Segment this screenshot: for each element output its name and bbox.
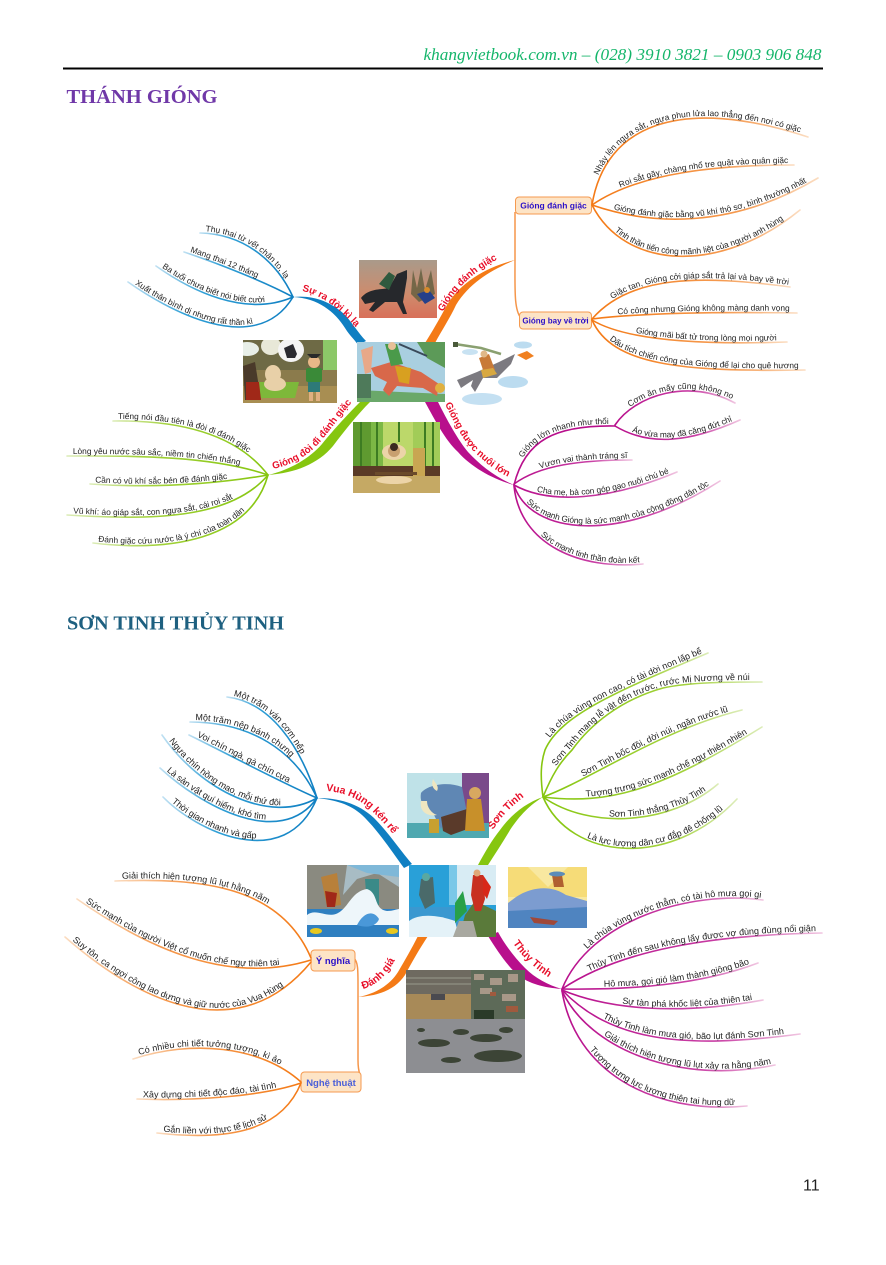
- main branch: Sơn Tinh: Sơn Tinh: [489, 793, 524, 829]
- detail: Gióng mãi bất tử: Gióng mãi bất tử trong lòng mọi người: [636, 328, 776, 342]
- box: Ý nghĩa: [311, 950, 355, 971]
- detail: Ba tuổi: Ba tuổi chưa biết nói biết cười: [162, 263, 264, 302]
- detail: Mang thai: [183, 246, 294, 298]
- detail: Là sản vật: [160, 765, 317, 822]
- box: Gióng bay về trời: Gióng bay về trời: [522, 316, 589, 326]
- detail: Sơn Tinh mang lễ vật: Sơn Tinh mang lễ vật đến trước, rước Mị Nương về núi: [552, 673, 750, 766]
- detail: Tinh thần tiến công: Tinh thần tiến công mãnh liệt của người anh hùng: [616, 216, 784, 256]
- detail: Voi chín ngà: Voi chín ngà, gà chín cựa: [199, 731, 290, 783]
- detail: Tượng trưng sức mạnh: Tượng trưng sức mạnh chế ngự thiên nhiên: [585, 727, 749, 799]
- detail: Nhảy lên ngựa sắt: Nhảy lên ngựa sắt, ngựa phun lửa lao thẳng đến nơi có giặc: [594, 110, 801, 175]
- main branch: Gióng đánh giặc: [426, 256, 514, 342]
- detail: Ngựa chín hồng mao: Ngựa chín hồng mao, mỗi thứ đôi: [169, 738, 280, 806]
- detail: Cơm ăn: [614, 382, 736, 426]
- detail: Sức mạnh tinh thần: Sức mạnh tinh thần đoàn kết: [542, 532, 640, 563]
- detail: Giải thích hiện tượng lũ: Giải thích hiện tượng lũ lụt hằng năm: [122, 870, 272, 906]
- main branch: Vua Hùng kén rể: [318, 784, 412, 868]
- detail: Gióng lớn nhanh: Gióng lớn nhanh như thổi: [519, 417, 608, 456]
- detail: Lòng yêu nước: Lòng yêu nước sâu sắc, niềm tin chiến thắng: [74, 448, 240, 466]
- detail: Có công: Có công nhưng Gióng không màng danh vọng: [618, 304, 790, 314]
- detail: Vươn vai: Vươn vai thành tráng sĩ: [538, 452, 628, 468]
- detail: Sơn Tinh thắng: Sơn Tinh thắng Thủy Tinh: [609, 784, 707, 819]
- detail: Thủy Tinh làm mưa: Thủy Tinh làm mưa gió, bão lụt đánh Sơn Tinh: [602, 1011, 784, 1041]
- detail: Mang thai: Mang thai 12 tháng: [190, 246, 258, 279]
- detail: Thụ thai: [199, 226, 294, 298]
- branch group: Gióng được nuôi lớn details: [513, 382, 741, 566]
- detail: Sức mạnh Gióng: Sức mạnh Gióng là sức mạnh của cộng đồng dân tộc: [527, 482, 708, 526]
- mind map: Thánh Gióng: [66, 110, 819, 566]
- detail: Cha mẹ: Cha mẹ, bà con góp gạo nuôi chú bé: [538, 468, 668, 496]
- detail: Một trăm ván: Một trăm ván cơm nếp: [234, 690, 304, 754]
- image: Thủy Tinh raising flood: [508, 867, 587, 928]
- detail: Sự tàn phá: [562, 990, 763, 1009]
- image: baby and father in village: [243, 340, 337, 403]
- box: Ý nghĩa: Ý nghĩa: [316, 955, 351, 967]
- branch group: Sơn Tinh details: [541, 646, 762, 848]
- box: Nghệ thuật: [301, 1072, 361, 1092]
- detail: Một trăm nệp: Một trăm nệp bánh chưng: [196, 714, 294, 758]
- detail: Thủy Tinh làm mưa: [562, 990, 800, 1041]
- detail: Sức mạnh tinh thần: [513, 486, 644, 566]
- branch group: Vua Hùng kén rể details: [160, 688, 317, 840]
- image: Gióng flying to sky: [453, 342, 534, 405]
- main branch: Sự ra đời kì lạ: [294, 284, 366, 344]
- box: Gióng bay về trời: [520, 312, 592, 329]
- detail: Suy tôn: Suy tôn, ca ngợi công lao dựng và giữ nước của Vua Hùng: [71, 934, 285, 1010]
- detail: Nhảy lên ngựa sắt: [591, 110, 809, 204]
- detail: Giặc tan: Giặc tan, Gióng cởi giáp sắt trả lại và bay về trời: [610, 270, 789, 298]
- detail: Lòng yêu nước: [66, 448, 266, 475]
- page number: 11: [803, 1178, 820, 1194]
- header contact line: khangvietbook.com.vn – (028) 3910 3821 – 0903 906 848: [424, 45, 822, 64]
- main branch: Thủy Tinh: Thủy Tinh: [514, 939, 551, 977]
- detail: Có nhiều chi tiết: [133, 1038, 301, 1082]
- detail: Dấu tích: [591, 320, 806, 372]
- detail: Tiếng nói: Tiếng nói đầu tiên là đòi đi đánh giặc: [118, 412, 250, 452]
- detail: Thụ thai: Thụ thai từ vết chân to, lạ: [206, 226, 288, 279]
- detail: Một trăm nệp: [190, 712, 317, 798]
- detail: Tượng trưng lực lượng: [562, 991, 747, 1107]
- main branch: Sự ra đời kì lạ: Sự ra đời kì lạ: [302, 284, 358, 328]
- main branch: Sơn Tinh: [478, 793, 542, 865]
- detail: Giải thích hiện tượng: [562, 991, 775, 1071]
- detail: Là chúa vùng nước thẳm: [0, 0, 763, 989]
- title: Thánh Gióng: THÁNH GIÓNG: [66, 84, 218, 108]
- image: Thủy Tinh and Sơn Tinh (centre): [409, 865, 496, 937]
- detail: Có nhiều chi tiết: Có nhiều chi tiết tưởng tượng, kì ảo: [137, 1038, 284, 1067]
- detail: Tượng trưng lực lượng: Tượng trưng lực lượng thiên tai hung dữ: [588, 1044, 735, 1107]
- detail: Gắn liền: [157, 1083, 301, 1136]
- branch group: Đánh giá details: [65, 870, 361, 1136]
- detail: Sự tàn phá: Sự tàn phá khốc liệt của thiên tai: [622, 992, 753, 1009]
- image: Gióng eating in bamboo grove: [353, 422, 440, 493]
- detail: Áo vừa may: Áo vừa may đã căng đứt chỉ: [632, 416, 732, 439]
- detail: Giải thích hiện tượng lũ: [115, 870, 311, 958]
- detail: Là chúa vùng non cao: Là chúa vùng non cao, có tài dời non lấp bể: [545, 646, 702, 738]
- detail: Là chúa vùng non cao: [541, 646, 708, 797]
- detail: Vũ khí: [66, 475, 269, 518]
- detail: Cần có vũ khí: Cần có vũ khí sắc bén đề đánh giặc: [96, 473, 227, 484]
- detail: Vũ khí: Vũ khí: áo giáp sắt, con ngựa sắt, cái roi sắt: [74, 493, 233, 517]
- detail: Gắn liền: Gắn liền với thực tế lịch sử: [163, 1112, 269, 1136]
- branch group: Gióng đánh giặc details: [514, 110, 819, 372]
- main branch: Vua Hùng kén rể: Vua Hùng kén rể: [326, 784, 399, 833]
- box: Gióng đánh giặc: Gióng đánh giặc: [520, 200, 587, 210]
- image: black horse battle: [359, 260, 437, 318]
- main branch: Gióng được nuôi lớn: Gióng được nuôi lớn: [446, 402, 510, 476]
- detail: Thời gian: Thời gian nhanh và gấp: [173, 798, 256, 840]
- detail: Gióng đánh giặc bằng vũ khí: Gióng đánh giặc bằng vũ khí thô sơ, bình thường nhất: [614, 178, 807, 218]
- main branch: Thủy Tinh: [488, 932, 562, 989]
- image: Sơn Tinh and Thủy Tinh battle waves: [307, 865, 399, 937]
- detail: Roi sắt gãy: [592, 156, 795, 205]
- detail: Giải thích hiện tượng: Giải thích hiện tượng lũ lụt xảy ra hằng năm: [603, 1029, 772, 1071]
- image: flood photos: [406, 970, 525, 1073]
- detail: Thời gian: [163, 796, 317, 840]
- detail: Tiếng nói: [112, 412, 268, 474]
- detail: Một trăm ván: [227, 688, 317, 798]
- detail: Giặc tan: [591, 270, 791, 320]
- detail: Gióng mãi bất tử: [591, 320, 788, 344]
- detail: Đánh giặc cứu nước: [92, 475, 269, 546]
- detail: Voi chín ngà: [189, 729, 317, 798]
- title: Sơn Tinh Thủy Tinh: SƠN TINH THỦY TINH: [67, 612, 284, 634]
- detail: Roi sắt gãy: Roi sắt gãy, chàng nhổ tre quật vào quân giặc: [618, 156, 788, 188]
- detail: Gióng lớn nhanh: [513, 417, 616, 486]
- main branch: Đánh giá: [358, 936, 428, 997]
- image: Gióng on red horse (centre): [357, 342, 445, 402]
- detail: Là lực lượng dân cư: [543, 797, 737, 848]
- image: elephant and suitors: [407, 773, 489, 838]
- detail: Xây dựng chi tiết: Xây dựng chi tiết độc đáo, tài tình: [143, 1080, 277, 1099]
- detail: Sơn Tinh bốc đồi: [543, 704, 742, 797]
- detail: Dấu tích: Dấu tích chiến công của Gióng để lại cho quê hương: [610, 336, 798, 370]
- detail: Sơn Tinh thắng: [543, 784, 718, 819]
- detail: Là lực lượng dân cư: Là lực lượng dân cư đắp đê chống lũ: [586, 803, 725, 848]
- main branch: Đánh giá: Đánh giá: [361, 958, 395, 989]
- detail: Đánh giặc cứu nước: Đánh giặc cứu nước là ý chí của toàn dân: [98, 508, 244, 546]
- detail: Hô mưa: Hô mưa, gọi gió làm thành giông bão: [604, 956, 750, 989]
- detail: Là sản vật: Là sản vật quí hiếm, khó tìm: [167, 766, 266, 820]
- detail: Tinh thần tiến công: [592, 206, 801, 258]
- branch group: Gióng đòi đi đánh giặc details: [66, 412, 269, 546]
- branch group: Sự ra đời kì lạ details: [127, 226, 294, 328]
- detail: Thủy Tinh đến sau: Thủy Tinh đến sau không lấy được vợ đùng đùng nổi giận: [585, 923, 816, 973]
- detail: Xuất thân: Xuất thân bình dị nhưng rất thần kì: [135, 280, 252, 325]
- box: Gióng đánh giặc: [516, 197, 592, 214]
- detail: Sức mạnh của người Việt: Sức mạnh của người Việt cổ muốn chế ngự thiên tai: [84, 896, 280, 968]
- detail: Sơn Tinh mang lễ vật: [543, 672, 762, 797]
- box: Nghệ thuật: Nghệ thuật: [306, 1078, 357, 1089]
- main branch: Gióng đánh giặc: Gióng đánh giặc: [438, 256, 496, 310]
- detail: Cần có vũ khí: [89, 473, 269, 486]
- detail: Xuất thân: [127, 280, 294, 328]
- detail: Thủy Tinh đến sau: [562, 923, 822, 989]
- detail: Cơm ăn: Cơm ăn mấy cũng không no: [628, 382, 733, 406]
- detail: Có công: [591, 304, 798, 320]
- detail: Vươn vai: [513, 452, 633, 484]
- detail: Sơn Tinh bốc đồi: Sơn Tinh bốc đồi, dời núi, ngăn nước lũ: [579, 704, 729, 778]
- main branch: Gióng đòi đi đánh giặc: Gióng đòi đi đánh giặc: [272, 400, 351, 468]
